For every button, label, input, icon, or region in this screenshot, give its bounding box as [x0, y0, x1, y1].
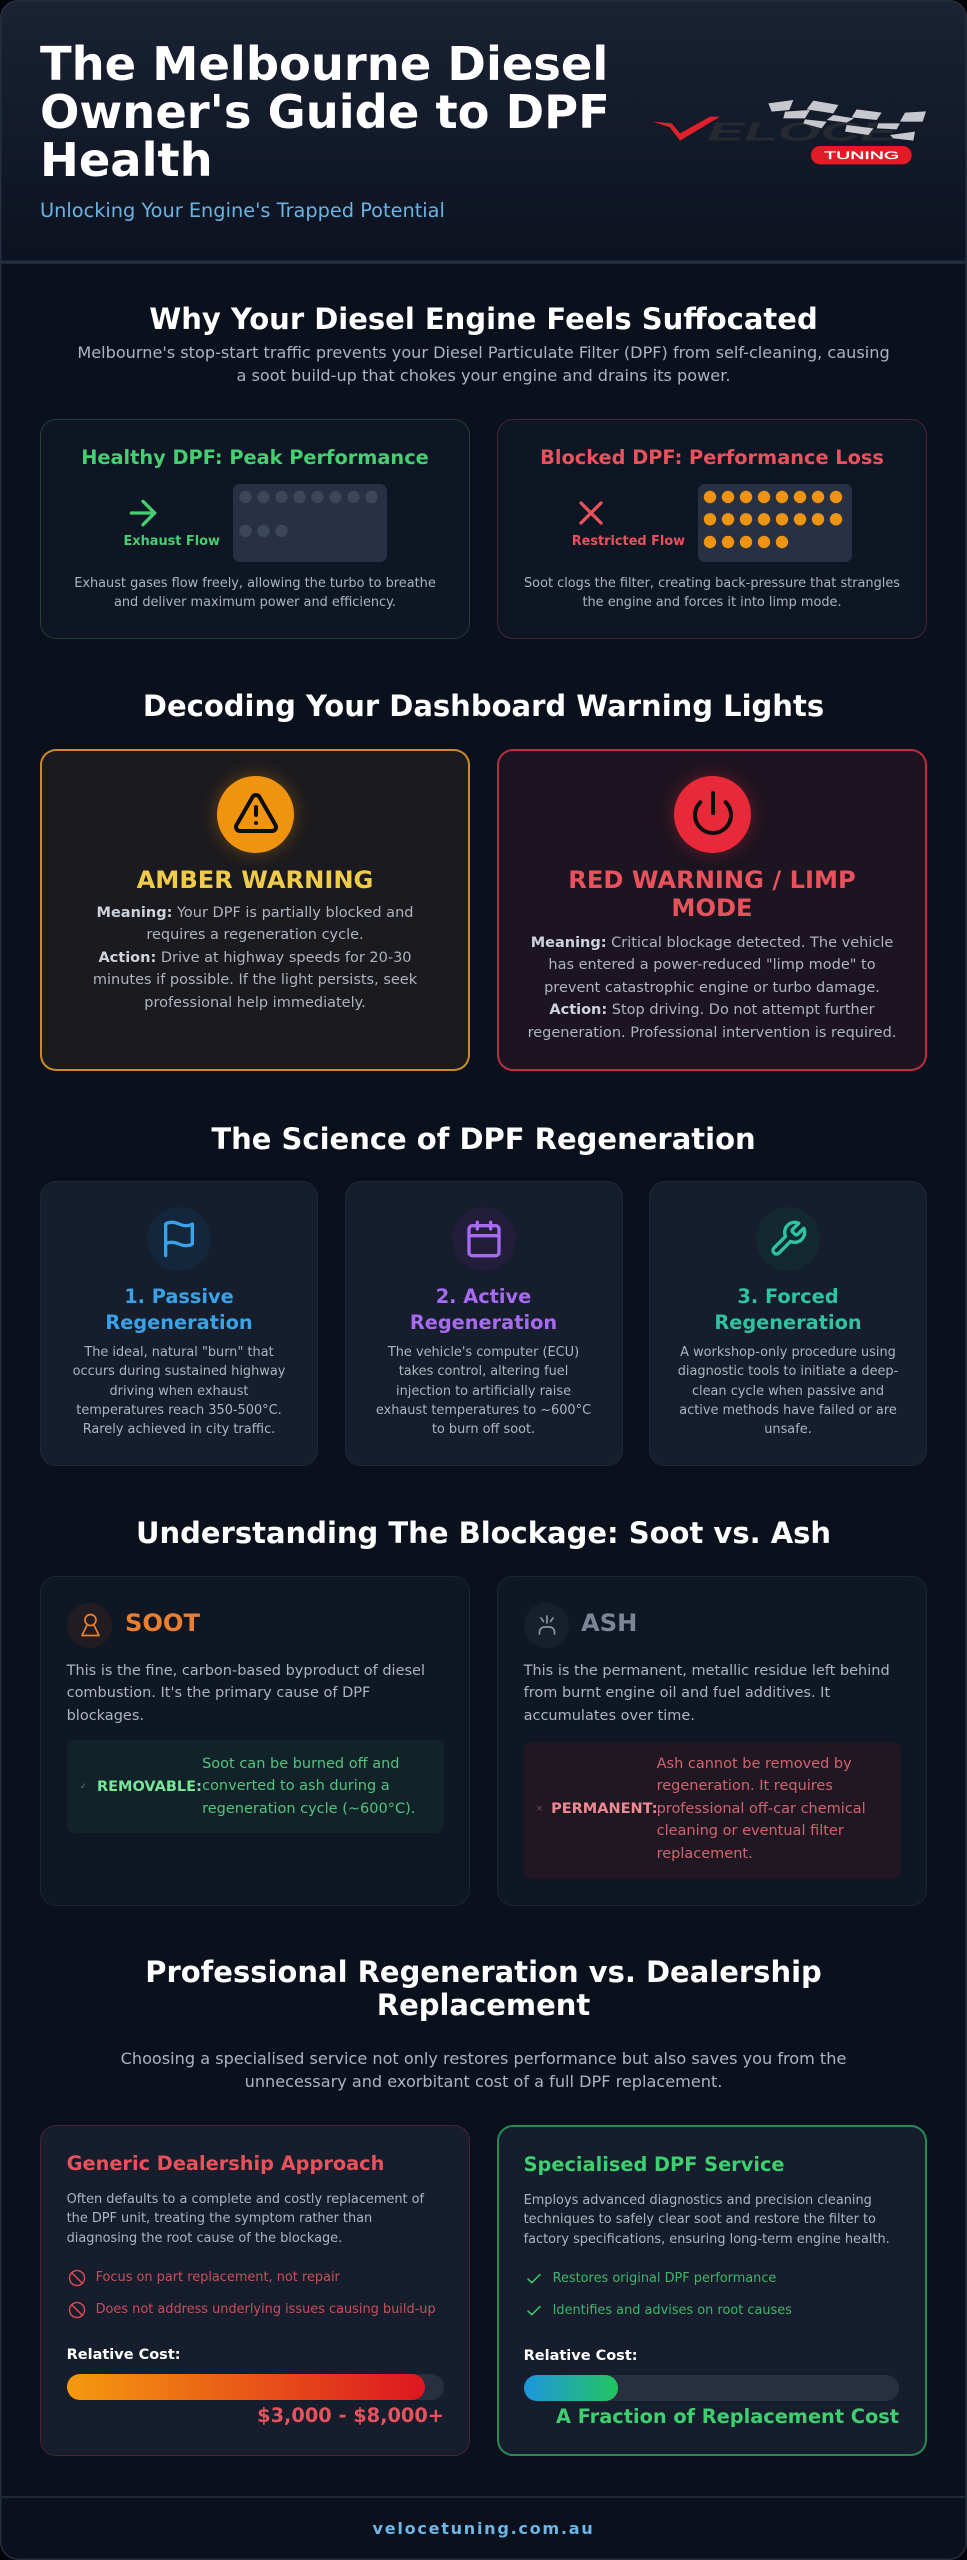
soot text [66, 1663, 425, 1724]
red text: Meaning: Critical blockage detected. The vehicle [531, 934, 893, 950]
removable text: Soot can be burned off and [202, 1756, 400, 1772]
healthy description: Exhaust gases flow freely, allowing the turbo to breathe [74, 576, 436, 591]
passive text: Rarely achieved in city traffic. [83, 1422, 275, 1437]
permanent text [656, 1756, 866, 1862]
item text: Does not address underlying issues causing build-up [96, 2302, 436, 2316]
passive text: The ideal, natural "burn" that [84, 1345, 274, 1360]
active text: The vehicle's computer (ECU) [388, 1345, 579, 1360]
panel: dealership approach [40, 2125, 470, 2456]
removable text: converted to ash during a [202, 1778, 390, 1794]
icon: check [527, 2274, 541, 2284]
red text: regeneration. Professional intervention is required. [528, 1024, 896, 1040]
active text: injection to artificially raise [396, 1384, 571, 1399]
bar fill [524, 2375, 618, 2401]
amber text: requires a regeneration cycle. [146, 927, 364, 943]
title [40, 37, 610, 187]
forced title [714, 1285, 862, 1334]
active title: 2. Active [436, 1285, 531, 1308]
permanent text: professional off-car chemical [657, 1801, 866, 1817]
passive text: occurs during sustained highway [73, 1364, 285, 1379]
list item 2 [68, 2302, 436, 2318]
specialised title: Specialised DPF Service [524, 2153, 785, 2176]
forced title: 3. Forced [737, 1285, 839, 1308]
soot text: This is the fine, carbon-based byproduct of diesel [67, 1663, 425, 1679]
amber text: Meaning: Your DPF is partially blocked and [97, 904, 413, 920]
logo: Veloce Tuning: TUNING [824, 150, 899, 162]
icon: flag [147, 1207, 211, 1271]
ash text [524, 1663, 890, 1724]
forced text: A workshop-only procedure using [680, 1345, 896, 1360]
intro paragraph: Melbourne's stop-start traffic prevents your Diesel Particulate Filter (DPF) from self-cleaning, causing [77, 343, 890, 362]
price note: A Fraction of Replacement Cost [556, 2405, 899, 2428]
item text: Restores original DPF performance [553, 2270, 776, 2286]
panel: forced regeneration [649, 1181, 927, 1466]
icon: soot [67, 1603, 112, 1648]
dealership title: Generic Dealership Approach [67, 2152, 384, 2175]
icon: ash [524, 1603, 569, 1648]
callout: permanent [524, 1742, 901, 1879]
permanent text: replacement. [657, 1846, 753, 1862]
bar fill [67, 2374, 425, 2400]
ash text: accumulates over time. [524, 1708, 695, 1724]
soot text: blockages. [67, 1708, 144, 1724]
cross mark: × [536, 1804, 543, 1814]
permanent label: PERMANENT: [551, 1801, 658, 1817]
red text: prevent catastrophic engine or turbo damage. [544, 980, 880, 996]
list item 1 [527, 2270, 776, 2286]
removable text [202, 1756, 415, 1817]
intro paragraph [77, 343, 890, 385]
cost label: Relative Cost: [67, 2347, 181, 2363]
forced text: clean cycle when passive and [692, 1384, 884, 1399]
dealership text: Often defaults to a complete and costly replacement of [67, 2192, 424, 2207]
cost bar [67, 2374, 444, 2400]
panel: passive regeneration [40, 1181, 318, 1466]
intro paragraph: a soot build-up that chokes your engine and drains its power. [237, 366, 730, 385]
panel: blocked DPF [497, 419, 927, 639]
active text: exhaust temperatures to ~600°C [376, 1403, 591, 1418]
heading: soot vs ash: Understanding The Blockage: Soot vs. Ash [136, 1516, 831, 1550]
heading: professional vs dealership: Professional Regeneration vs. Dealership [145, 1955, 822, 1989]
footer url: velocetuning.com.au [373, 2519, 594, 2538]
red text: has entered a power-reduced "limp mode" to [548, 957, 876, 973]
amber text [93, 904, 417, 1010]
icon: warning triangle [217, 776, 294, 853]
icon: check [527, 2306, 541, 2316]
passive title: Regeneration [105, 1311, 253, 1334]
forced text: active methods have failed or are [679, 1403, 897, 1418]
removable label: REMOVABLE: [97, 1779, 202, 1795]
specialised text: Employs advanced diagnostics and precision cleaning [524, 2193, 872, 2208]
healthy description [74, 576, 436, 610]
red title: RED WARNING / LIMP [568, 866, 856, 894]
specialised text: factory specifications, ensuring long-term engine health. [524, 2232, 890, 2247]
title: The Melbourne Diesel [40, 37, 608, 91]
heading: warning lights: Decoding Your Dashboard Warning Lights [143, 689, 824, 723]
list item 2 [527, 2302, 792, 2318]
removable text: regeneration cycle (~600°C). [202, 1801, 415, 1817]
panel: amber warning [40, 749, 470, 1071]
blocked title: Blocked DPF: Performance Loss [540, 446, 884, 469]
forced title: Regeneration [714, 1311, 862, 1334]
panel: healthy DPF [40, 419, 470, 639]
passive text: driving when exhaust [110, 1384, 248, 1399]
red title: MODE [671, 894, 753, 922]
item text: Identifies and advises on root causes [553, 2302, 792, 2318]
header band [0, 0, 967, 264]
icon: wrench [756, 1207, 820, 1271]
subtitle: Unlocking Your Engine's Trapped Potential [40, 199, 445, 222]
amber text: Action: Drive at highway speeds for 20-30 [98, 950, 412, 966]
dealership text: diagnosing the root cause of the blockage. [67, 2231, 342, 2246]
blocked description: the engine and forces it into limp mode. [582, 595, 842, 610]
forced text: diagnostic tools to initiate a deep- [678, 1364, 898, 1379]
passive title: 1. Passive [124, 1285, 234, 1308]
dealership text: the DPF unit, treating the symptom rather than [67, 2211, 372, 2226]
heading: why suffocated: Why Your Diesel Engine Feels Suffocated [149, 302, 818, 336]
icon: cross [579, 501, 603, 525]
active text: takes control, altering fuel [399, 1364, 568, 1379]
comparison intro: unnecessary and exorbitant cost of a full DPF replacement. [245, 2072, 722, 2091]
filter diagram clean [233, 484, 387, 562]
specialised text [524, 2193, 890, 2247]
icon: ban [68, 2270, 86, 2286]
title: Owner's Guide to DPF [40, 85, 610, 139]
passive text: temperatures reach 350-500°C. [76, 1403, 282, 1418]
heading: professional vs dealership [145, 1955, 822, 2022]
active text [376, 1345, 591, 1437]
cost bar [524, 2375, 899, 2401]
red title [568, 866, 856, 922]
footer [0, 2496, 967, 2560]
blocked description: Soot clogs the filter, creating back-pressure that strangles [524, 576, 900, 591]
heading: science: The Science of DPF Regeneration [211, 1122, 756, 1156]
panel: specialised service [497, 2125, 927, 2456]
filter diagram clogged [698, 484, 852, 562]
cost label: Relative Cost: [524, 2348, 638, 2364]
passive title [105, 1285, 253, 1334]
comparison intro: Choosing a specialised service not only restores performance but also saves you from the [121, 2049, 846, 2068]
callout: removable [67, 1740, 444, 1833]
permanent text: cleaning or eventual filter [657, 1823, 844, 1839]
active title [410, 1285, 557, 1334]
list item 1 [68, 2270, 340, 2286]
amber text: minutes if possible. If the light persists, seek [93, 972, 417, 988]
panel: active regeneration [344, 1181, 622, 1466]
panel: red warning [497, 749, 927, 1071]
restricted flow label: Restricted Flow [572, 534, 685, 549]
healthy description: and deliver maximum power and efficiency. [114, 595, 396, 610]
red text: Action: Stop driving. Do not attempt further [549, 1002, 875, 1018]
soot title: SOOT [125, 1609, 200, 1637]
healthy title: Healthy DPF: Peak Performance [81, 446, 429, 469]
heading: professional vs dealership: Replacement [377, 1988, 590, 2022]
icon: calendar [452, 1207, 516, 1271]
icon: arrow [130, 500, 156, 526]
logo: Veloce Tuning [652, 100, 926, 164]
panel: soot [40, 1576, 470, 1906]
passive text [73, 1345, 285, 1437]
soot text: combustion. It's the primary cause of DPF [67, 1685, 370, 1701]
forced text: unsafe. [764, 1422, 812, 1437]
check mark: ✓ [80, 1782, 87, 1792]
forced text [678, 1345, 898, 1437]
active title: Regeneration [410, 1311, 557, 1334]
amber text: professional help immediately. [144, 994, 366, 1010]
panel: ash [497, 1576, 927, 1906]
ash title: ASH [581, 1609, 637, 1637]
blocked description [524, 576, 900, 610]
active text: to burn off soot. [432, 1422, 535, 1437]
ash text: This is the permanent, metallic residue left behind [524, 1663, 890, 1679]
amber title: AMBER WARNING [137, 866, 373, 894]
exhaust flow label: Exhaust Flow [124, 534, 220, 549]
icon: power [674, 776, 751, 853]
comparison intro [121, 2049, 846, 2091]
item text: Focus on part replacement, not repair [96, 2270, 340, 2284]
specialised text: techniques to safely clear soot and restore the filter to [524, 2212, 876, 2227]
logo: Veloce Tuning: ELOCE [707, 117, 899, 147]
permanent text: Ash cannot be removed by [657, 1756, 852, 1772]
title: Health [40, 133, 213, 187]
price: $3,000 - $8,000+ [257, 2404, 444, 2427]
red text [528, 934, 896, 1040]
icon: ban [68, 2302, 86, 2318]
permanent text: regeneration. It requires [657, 1778, 833, 1794]
ash text: from burnt engine oil and fuel additives. It [524, 1685, 830, 1701]
dealership text [66, 2192, 424, 2246]
